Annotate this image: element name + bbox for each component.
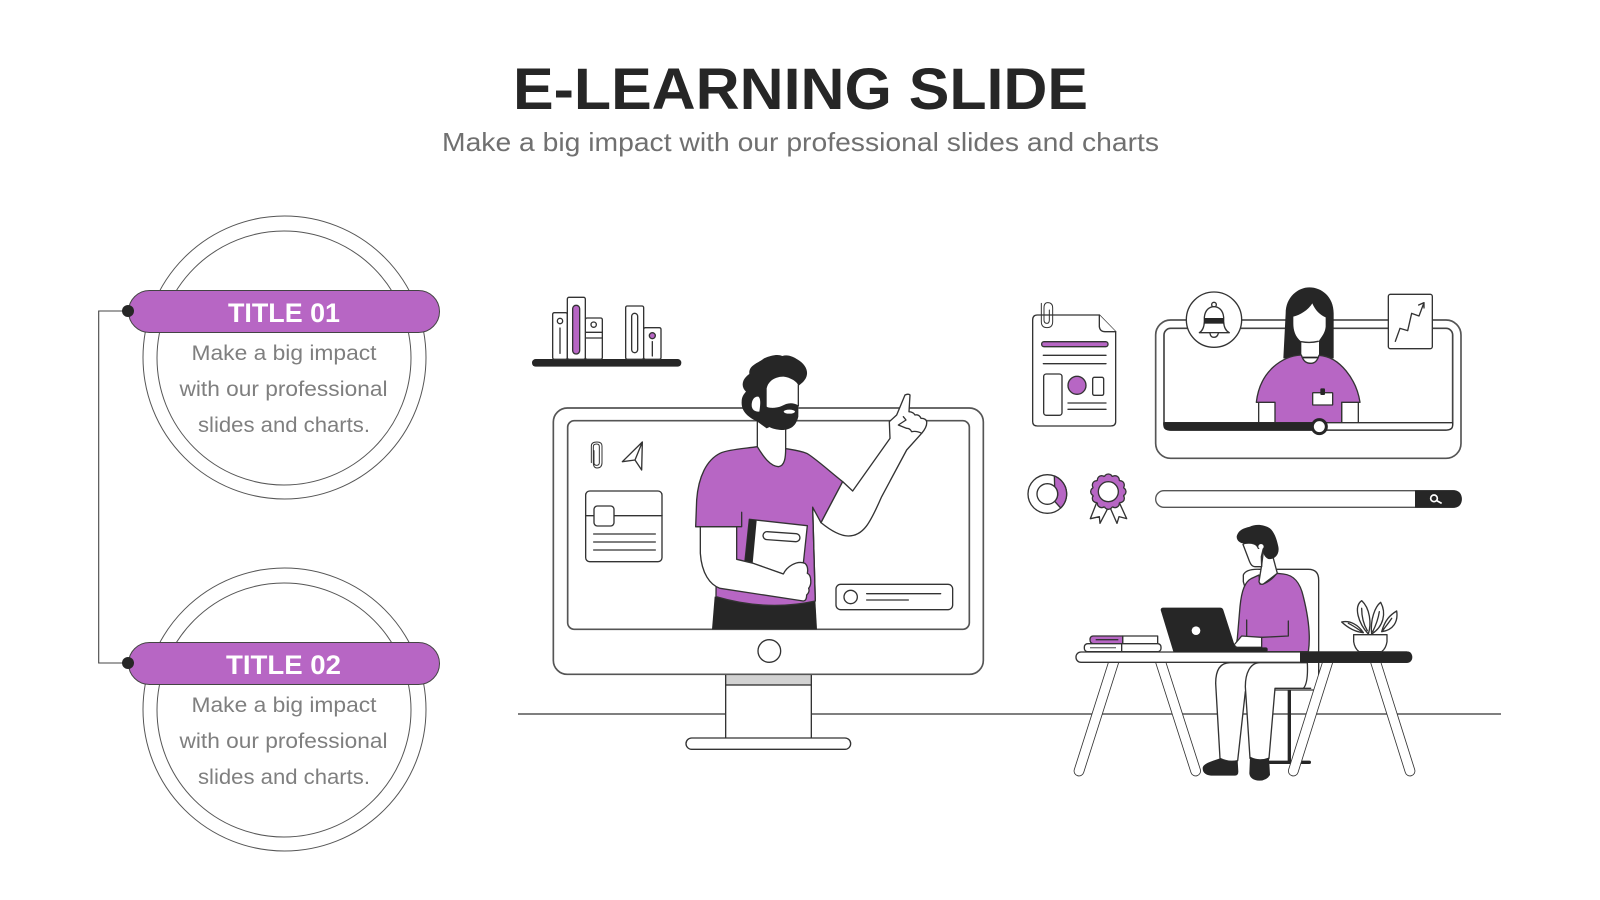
monitor xyxy=(553,408,983,749)
panel: title 01: slides and charts. xyxy=(198,414,370,437)
panel: title 02: with our professional xyxy=(178,730,388,753)
icon: growth chart xyxy=(1388,294,1432,349)
illustration: online class window and icons xyxy=(1028,287,1462,523)
icon: paper plane xyxy=(622,442,642,470)
laptop xyxy=(1161,608,1268,652)
icon: bookshelf xyxy=(532,297,681,367)
card: left xyxy=(586,491,662,562)
chair xyxy=(1243,569,1319,764)
icon: document xyxy=(1033,303,1116,426)
card: right xyxy=(836,584,953,610)
panel: title 02: TITLE 02 xyxy=(226,650,341,680)
icon: bell xyxy=(1186,292,1242,347)
floor line xyxy=(518,713,1501,715)
search bar xyxy=(1156,490,1462,508)
panel: title 02: slides and charts. xyxy=(198,766,370,789)
icon: paperclip xyxy=(591,442,602,468)
figure: student legs xyxy=(1203,663,1307,781)
icon: donut chart xyxy=(1028,475,1067,513)
panel: title 01 xyxy=(122,216,440,499)
figure: student torso and head xyxy=(1234,525,1309,652)
illustration: student at desk xyxy=(1076,525,1412,781)
panel: title 01: Make a big impact xyxy=(192,342,377,365)
progress bar xyxy=(1163,420,1453,434)
subtitle: Make a big impact with our professional slides and charts xyxy=(442,127,1159,157)
desk xyxy=(1076,651,1412,771)
figure: woman presenter xyxy=(1256,287,1360,423)
title: E-LEARNING SLIDE xyxy=(513,57,1088,122)
panel: title 02 xyxy=(122,568,440,851)
panel: title 02: Make a big impact xyxy=(192,694,377,717)
books on desk xyxy=(1084,636,1161,652)
video window xyxy=(1156,320,1461,458)
connector line xyxy=(99,311,128,663)
panel: title 01: TITLE 01 xyxy=(228,298,340,328)
icon: award ribbon xyxy=(1090,474,1127,523)
illustration: teacher in monitor xyxy=(532,297,983,749)
icon: potted plant xyxy=(1342,601,1397,652)
panel: title 01: with our professional xyxy=(178,378,388,401)
figure: teacher xyxy=(696,355,927,629)
